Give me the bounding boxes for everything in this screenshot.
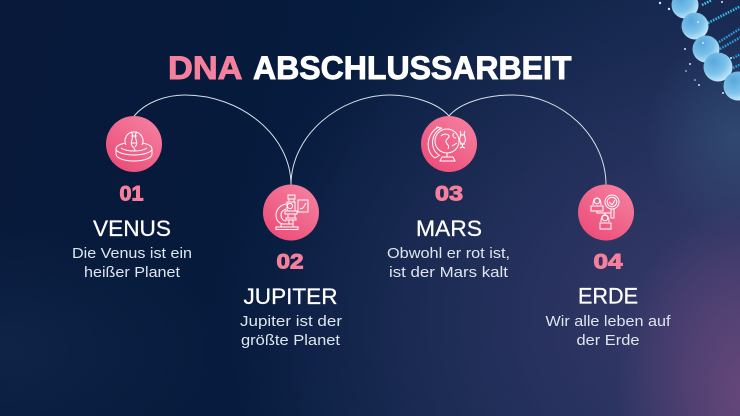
heading Mars: MARS: [416, 216, 482, 241]
description Venus: heißer Planet: [84, 265, 180, 281]
number 03: 03: [435, 182, 463, 206]
item 3: Mars: [387, 116, 510, 281]
number 01: 01: [120, 182, 144, 206]
connecting arcs: [134, 95, 606, 185]
heading Erde: ERDE: [578, 284, 638, 309]
number 04: 04: [594, 250, 623, 274]
item 1: Venus: [72, 116, 192, 281]
item 4: Erde: [546, 184, 672, 349]
dna strand decoration: [659, 0, 740, 100]
description Mars: Obwohl er rot ist,: [387, 246, 510, 262]
heading Venus: VENUS: [93, 216, 171, 241]
description Jupiter: Jupiter ist der: [240, 314, 342, 330]
description Mars: ist der Mars kalt: [389, 265, 508, 281]
description Jupiter: größte Planet: [241, 333, 340, 349]
title: DNA: [168, 50, 242, 86]
item 2: Jupiter: [240, 184, 342, 349]
icon: microscope: [263, 184, 319, 240]
title: ABSCHLUSSARBEIT: [253, 50, 572, 86]
icon: petri dish with dna: [106, 116, 162, 172]
description Venus: Die Venus ist ein: [72, 246, 192, 262]
description Erde: Wir alle leben auf: [546, 314, 672, 330]
icon: globe with dna: [421, 116, 477, 172]
number 02: 02: [276, 250, 304, 274]
icon: researchers with magnifier: [578, 184, 634, 240]
description Erde: der Erde: [576, 333, 640, 349]
heading Jupiter: JUPITER: [244, 284, 338, 309]
